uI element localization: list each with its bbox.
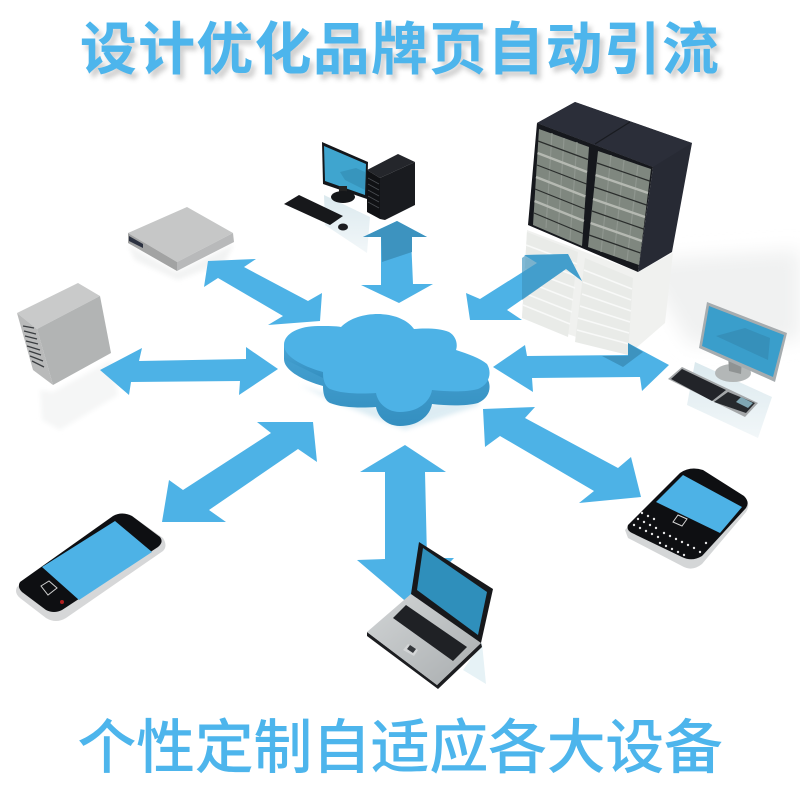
icon: keypad smartphone xyxy=(625,469,748,569)
title: 设计优化品牌页自动引流 xyxy=(80,18,720,82)
keyboard xyxy=(284,195,343,225)
arrow: router to cloud xyxy=(204,259,322,325)
icon: tower server xyxy=(17,283,111,385)
stand xyxy=(715,364,751,382)
arrow: smartphone to cloud xyxy=(483,407,641,503)
keypad xyxy=(633,512,707,556)
right rack panel xyxy=(588,151,651,265)
rack reflection xyxy=(522,230,673,355)
mouse xyxy=(338,224,348,230)
icon: server rack xyxy=(528,102,692,272)
screen xyxy=(699,302,787,382)
left rack panel xyxy=(533,129,589,246)
icon: touch smartphone xyxy=(16,514,166,621)
icon: laptop xyxy=(367,542,493,689)
arrow: computer to cloud xyxy=(361,221,433,303)
monitor xyxy=(322,142,368,199)
arrow: laptop to cloud xyxy=(357,445,454,605)
arrow: tower server to cloud xyxy=(100,347,278,395)
phone screen xyxy=(656,475,742,533)
keyboard xyxy=(668,367,758,417)
arrow: touch phone to cloud xyxy=(162,422,317,522)
floor reflections xyxy=(40,195,800,438)
arrow overlap tints xyxy=(363,221,643,367)
tower xyxy=(367,154,415,178)
icon: desktop monitor and keyboard xyxy=(668,302,787,417)
icon: cloud xyxy=(284,314,490,426)
arrow: desktop monitor to cloud xyxy=(493,343,669,392)
icon: router box xyxy=(128,207,234,271)
subtitle: 个性定制自适应各大设备 xyxy=(77,715,723,781)
icon: desktop computer xyxy=(284,142,415,230)
phone screen xyxy=(42,521,152,600)
arrow: server rack to cloud xyxy=(466,254,582,320)
